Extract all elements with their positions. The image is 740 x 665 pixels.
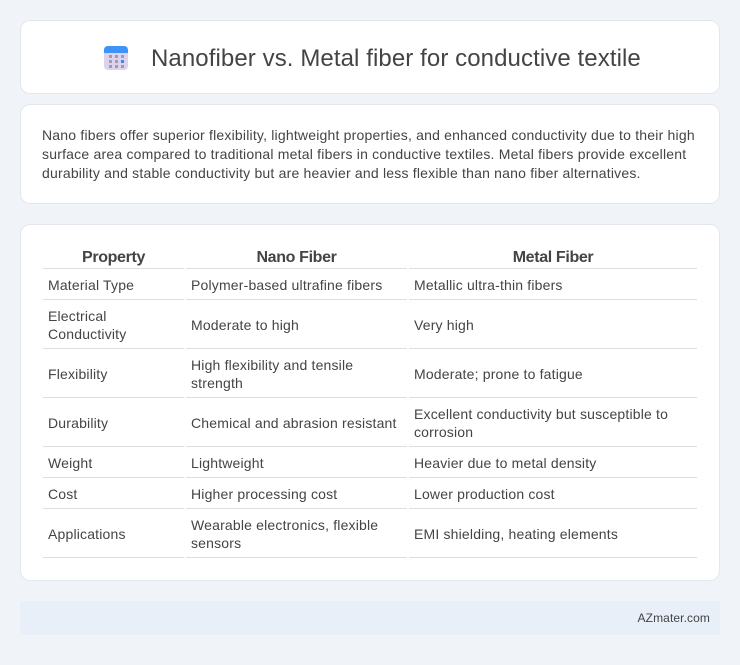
row: material type: Metallic ultra-thin fibers [414,277,563,293]
row: electrical conductivity: Moderate to high [191,317,299,333]
row: material type [48,277,563,293]
row: flexibility: Moderate; prone to fatigue [414,366,583,382]
row: cost: Higher processing cost [191,486,337,502]
row: electrical conductivity [48,308,474,342]
title: Nanofiber vs. Metal fiber for conductive textile [151,45,641,72]
row: durability [48,406,668,440]
row: cost [48,486,555,502]
panel: summary [20,104,720,204]
row: weight: Weight [48,455,92,471]
panel: comparison table [20,224,720,581]
row: flexibility: Flexibility [48,366,108,382]
summary text: durability and stable conductivity but are heavier and less flexible than nano fiber alternatives. [42,165,641,181]
panel: title card [20,20,720,94]
header row [82,249,594,266]
row: flexibility: strength [191,375,243,391]
row: electrical conductivity: Very high [414,317,474,333]
row: cost: Lower production cost [414,486,555,502]
row: weight: Lightweight [191,455,264,471]
row: electrical conductivity: Electrical [48,308,107,324]
header row: Nano Fiber [256,249,337,266]
icon: calendar [104,46,128,70]
row: electrical conductivity: Conductivity [48,326,126,342]
row: applications: EMI shielding, heating elements [414,526,618,542]
summary text [42,127,695,181]
row: applications: Applications [48,526,126,542]
row: durability: corrosion [414,424,473,440]
footer bar [20,601,720,635]
row: material type: Polymer-based ultrafine fibers [191,277,382,293]
footer credit: AZmater.com [638,611,710,625]
row: durability: Excellent conductivity but susceptible to [414,406,668,422]
header row: Metal Fiber [513,249,593,266]
summary text: Nano fibers offer superior flexibility, lightweight properties, and enhanced conductivity due to their high [42,127,695,143]
row: flexibility [48,357,583,391]
header row: Property [82,249,145,266]
row: durability: Chemical and abrasion resistant [191,415,397,431]
row: applications [48,517,618,551]
row: material type: Material Type [48,277,134,293]
row: durability: Durability [48,415,108,431]
row: applications: Wearable electronics, flexible [191,517,378,533]
row: cost: Cost [48,486,78,502]
row: weight [48,455,596,471]
summary text: surface area compared to traditional metal fibers in conductive textiles. Metal fibers provide excellent [42,146,686,162]
row: weight: Heavier due to metal density [414,455,596,471]
row: applications: sensors [191,535,241,551]
row: flexibility: High flexibility and tensile [191,357,353,373]
comparison table [43,249,697,558]
